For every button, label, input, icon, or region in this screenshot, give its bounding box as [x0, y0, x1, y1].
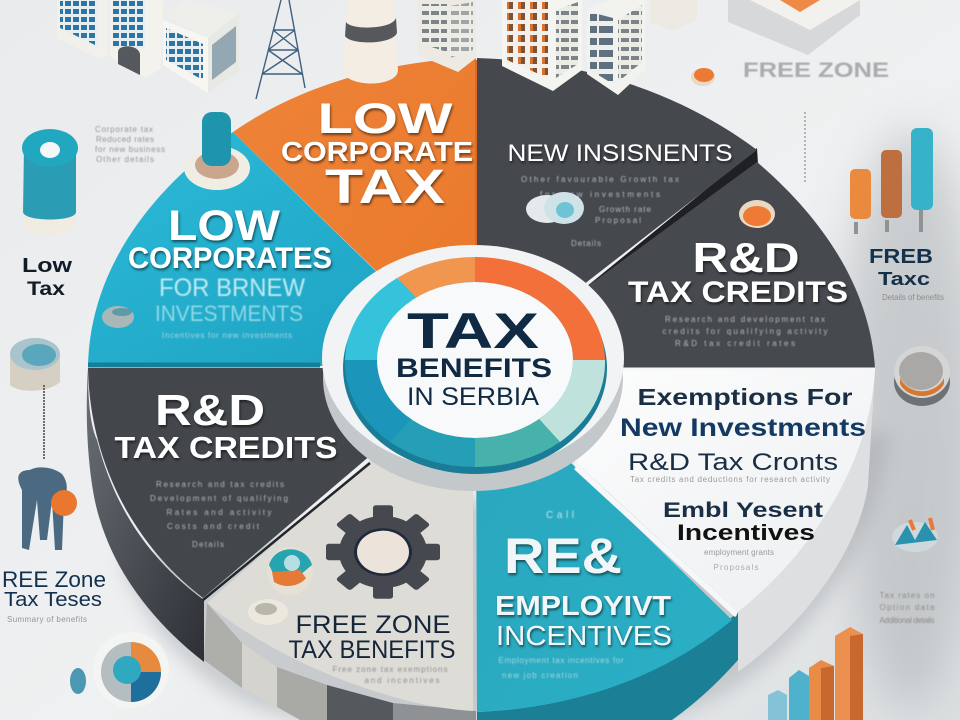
- icon: left small barrel: [10, 338, 60, 391]
- icon: small right chart: [892, 518, 938, 552]
- text: free tax side label: Details of benefits: [882, 293, 944, 302]
- heading: employment incentives: [495, 528, 672, 651]
- slice: white underlay: [575, 462, 738, 616]
- icon: orange badge: [739, 200, 775, 228]
- text: exemptions for new investments: New Investments: [620, 414, 866, 442]
- text: for new investments: [155, 274, 305, 340]
- icon: top left buildings: [57, 0, 239, 93]
- icon: blue drop: [70, 668, 86, 694]
- text: new insights details: Proposal: [595, 216, 641, 225]
- icon: bottom right bars: [768, 627, 863, 720]
- icon: pebble on teal slice: [102, 306, 134, 328]
- slice: low corporate tax orange: [233, 58, 476, 368]
- ring: teal green: [475, 419, 560, 467]
- text: for new investments: FOR BRNEW: [159, 274, 305, 302]
- text: exemptions for new investments: employment grants: [704, 548, 774, 557]
- text: free zone details: Free zone tax exemptions: [332, 665, 448, 674]
- pie chart: [87, 58, 875, 720]
- heading: low corporate tax: [281, 95, 473, 214]
- side: teal slice: [477, 612, 738, 720]
- text: free zone tax side label: Tax Teses: [4, 589, 102, 611]
- heading: employment incentives: INCENTIVES: [496, 620, 672, 651]
- text: employment details: [498, 510, 624, 680]
- icon: top right model: [728, 0, 860, 55]
- slice: exemptions white: [476, 370, 875, 612]
- slice: employment incentives teal: [476, 370, 732, 712]
- side: beige slice: [204, 603, 476, 720]
- slice: R&D tax credits dark right: [476, 162, 875, 368]
- text: free zone tax side label: Summary of benefits: [7, 615, 87, 624]
- ring: light orange: [397, 257, 475, 298]
- icon: teal peg: [184, 112, 250, 190]
- text: new insights details: Details: [571, 239, 601, 248]
- slice: free zone beige: [207, 370, 473, 711]
- text: new insights details: for new investments: [540, 190, 660, 199]
- heading: employment incentives: RE&: [504, 528, 622, 584]
- title: TAX: [407, 303, 539, 359]
- text: R&D right details: [662, 315, 828, 348]
- heading: R&D tax credits right: R&D: [692, 234, 800, 281]
- text: right side microcopy: Option data: [880, 603, 935, 612]
- panel: center hub: [322, 245, 624, 491]
- icon: right bar chart: [850, 128, 933, 234]
- pie shadow: [120, 430, 890, 720]
- slice separators: [203, 463, 370, 600]
- text: R&D left details: Details: [192, 540, 224, 549]
- side: dark slice: [87, 368, 204, 662]
- icon: pebbles: [526, 192, 584, 224]
- inner disc: [377, 282, 573, 438]
- icon: left teal cylinder: [22, 129, 78, 236]
- text: R&D left details: Development of qualifying: [150, 494, 288, 503]
- ring: cyan: [345, 278, 416, 360]
- text: R&D left details: Research and tax credits: [156, 480, 284, 489]
- text: R&D right details: Research and development tax: [665, 315, 825, 324]
- icon: center buildings: [418, 0, 645, 95]
- heading: new insights: NEW INSISNENTS: [508, 140, 732, 167]
- ring: orange red: [475, 257, 605, 360]
- text: exemptions for new investments: Incentives: [677, 520, 815, 545]
- text: low tax side label: Tax: [27, 279, 66, 300]
- text: exemptions for new investments: Proposals: [714, 563, 758, 572]
- side: white slice: [738, 370, 875, 672]
- heading: R&D tax credits left: [114, 386, 338, 465]
- text: new insights details: Other favourable Growth tax: [521, 175, 679, 184]
- icon: gear: [326, 505, 440, 599]
- icon: pebble: [248, 599, 288, 625]
- icon: lighthouse: [343, 0, 398, 84]
- text: new insights details: [521, 175, 679, 248]
- text: R&D right details: R&D tax credit rates: [675, 339, 795, 348]
- text: upper left microcopy: Other details: [96, 155, 154, 164]
- text: exemptions for new investments: Embl Yesent: [663, 499, 823, 522]
- heading: low corporate tax: LOW: [318, 95, 453, 143]
- background shade right: [840, 130, 960, 710]
- slice: low corporates teal: [88, 132, 473, 366]
- text: free tax side label: [869, 246, 944, 302]
- title: IN SERBIA: [407, 383, 539, 411]
- text: upper left microcopy: [95, 125, 165, 164]
- heading: low corporate tax: TAX: [325, 161, 445, 214]
- separator underlay top right: [570, 148, 758, 300]
- text: exemptions for new investments: Tax credits and deductions for research activity: [630, 475, 830, 484]
- ring: mint: [539, 360, 605, 442]
- heading: free zone tax benefits: [288, 611, 456, 664]
- icon: lattice tower: [256, 0, 305, 99]
- text: upper left microcopy: Reduced rates: [96, 135, 154, 144]
- ring: teal blue: [390, 419, 475, 467]
- text: for new investments: INVESTMENTS: [155, 301, 303, 326]
- title: BENEFITS: [396, 353, 552, 383]
- text: free zone tax side label: REE Zone: [2, 567, 106, 592]
- icon: orange button: [691, 68, 715, 86]
- text: R&D left details: Costs and credit: [167, 522, 260, 531]
- text: exemptions for new investments: R&D Tax Cronts: [628, 449, 838, 476]
- icon: left figure: [18, 467, 77, 550]
- heading: R&D tax credits right: [628, 234, 848, 309]
- title: [396, 303, 552, 411]
- text: exemptions for new investments: Exemptions For: [638, 384, 853, 410]
- text: free zone tax side label: [2, 567, 106, 624]
- heading: R&D tax credits left: R&D: [155, 386, 265, 435]
- text: free zone details: and incentives: [364, 676, 440, 685]
- heading: free zone tax benefits: TAX BENEFITS: [288, 636, 456, 664]
- text: exemptions for new investments: [620, 384, 866, 572]
- text: for new investments: Incentives for new investments: [162, 331, 292, 340]
- text: free zone details: [332, 665, 448, 685]
- heading: low corporate tax: CORPORATE: [281, 136, 473, 167]
- heading: low corporates: CORPORATES: [128, 242, 332, 275]
- text: employment details: Employment tax incentives for: [498, 656, 624, 665]
- text: upper left microcopy: Corporate tax: [95, 125, 153, 134]
- icon: cup: [650, 0, 697, 31]
- heading: employment incentives: EMPLOYIVT: [495, 590, 671, 621]
- heading: R&D tax credits left: TAX CREDITS: [114, 430, 338, 465]
- slice: R&D tax credits dark left: [88, 368, 473, 598]
- text: new insights details: Growth rate: [599, 205, 652, 214]
- icon: right disc: [894, 346, 950, 406]
- text: R&D left details: [150, 480, 288, 549]
- heading: low corporates: LOW: [168, 202, 280, 250]
- text: low tax side label: Low: [22, 255, 73, 277]
- text: employment details: new job creation: [502, 671, 578, 680]
- icon: colored ball: [267, 547, 313, 595]
- text: right side microcopy: Additional details: [880, 616, 934, 625]
- text: R&D right details: credits for qualifying activity: [662, 327, 828, 336]
- text: low tax side label: [22, 255, 73, 300]
- text: right side microcopy: Tax rates on: [880, 591, 934, 600]
- text: free zone faded label: FREE ZONE: [743, 59, 889, 82]
- heading: free zone tax benefits: FREE ZONE: [296, 611, 450, 639]
- text: free tax side label: Taxc: [878, 269, 930, 289]
- heading: R&D tax credits right: TAX CREDITS: [628, 276, 848, 309]
- icon: mini pie: [93, 632, 169, 708]
- text: upper left microcopy: for new business: [95, 145, 165, 154]
- text: R&D left details: Rates and activity: [166, 508, 272, 517]
- text: free tax side label: FREB: [869, 246, 933, 268]
- icon: dotted line left: [43, 385, 45, 460]
- heading: low corporates: [128, 202, 332, 275]
- icon: dotted line upper right: [804, 112, 806, 182]
- text: right side microcopy: [880, 591, 935, 625]
- slice: new insights dark: [476, 58, 757, 368]
- text: employment details: Call: [546, 510, 574, 521]
- ring: blue: [345, 360, 411, 442]
